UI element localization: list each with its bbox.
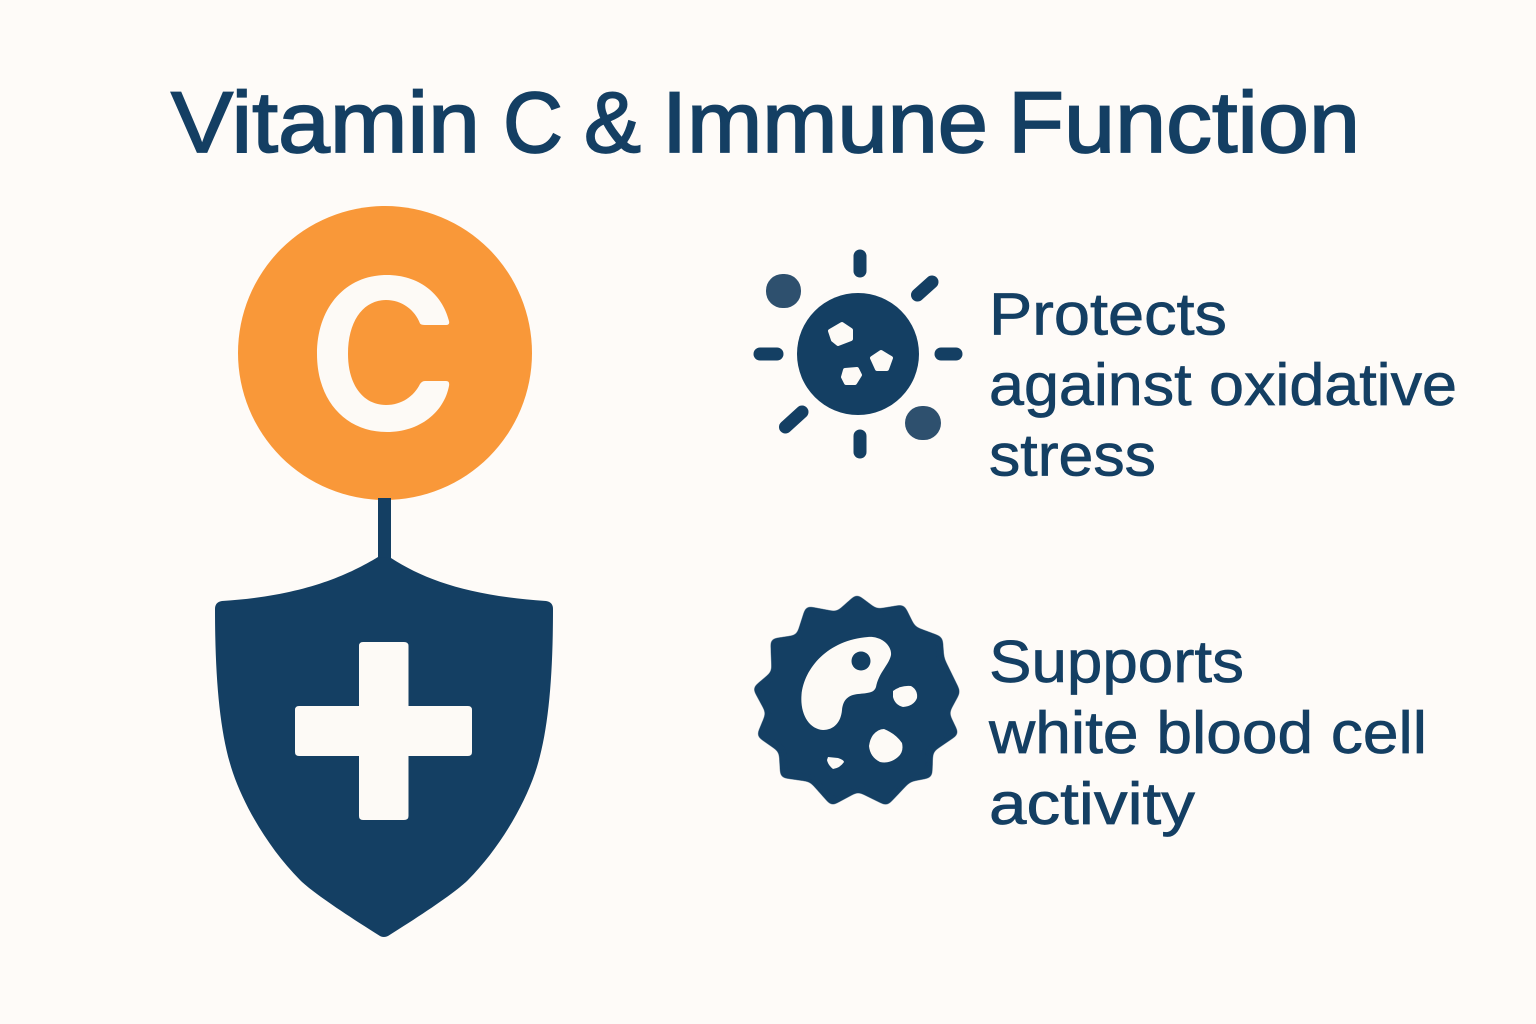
title: Immune bbox=[662, 75, 988, 171]
text: protects against oxidative stress: stress bbox=[989, 422, 1156, 488]
connector line bbox=[378, 498, 391, 562]
text: supports white blood cell activity: Supports bbox=[989, 629, 1244, 695]
text: protects against oxidative stress: against oxidative bbox=[989, 352, 1457, 418]
title: Function bbox=[1008, 75, 1360, 171]
text: protects against oxidative stress: Protects bbox=[989, 282, 1227, 348]
title: C bbox=[503, 75, 563, 171]
icon: orange vitamin C circle bbox=[238, 206, 532, 500]
icon: vitamin C shield bbox=[215, 206, 553, 937]
text: supports white blood cell activity: activity bbox=[989, 771, 1196, 837]
text: supports white blood cell activity: white blood cell bbox=[988, 700, 1427, 766]
title: & bbox=[584, 75, 641, 171]
title: Vitamin bbox=[171, 75, 480, 171]
icon: shield with cross bbox=[215, 557, 553, 937]
text: protects against oxidative stress bbox=[989, 282, 1457, 488]
icon: oxidative stress bbox=[760, 256, 956, 452]
icon: white blood cell bbox=[752, 594, 960, 806]
text: supports white blood cell activity bbox=[988, 629, 1427, 837]
